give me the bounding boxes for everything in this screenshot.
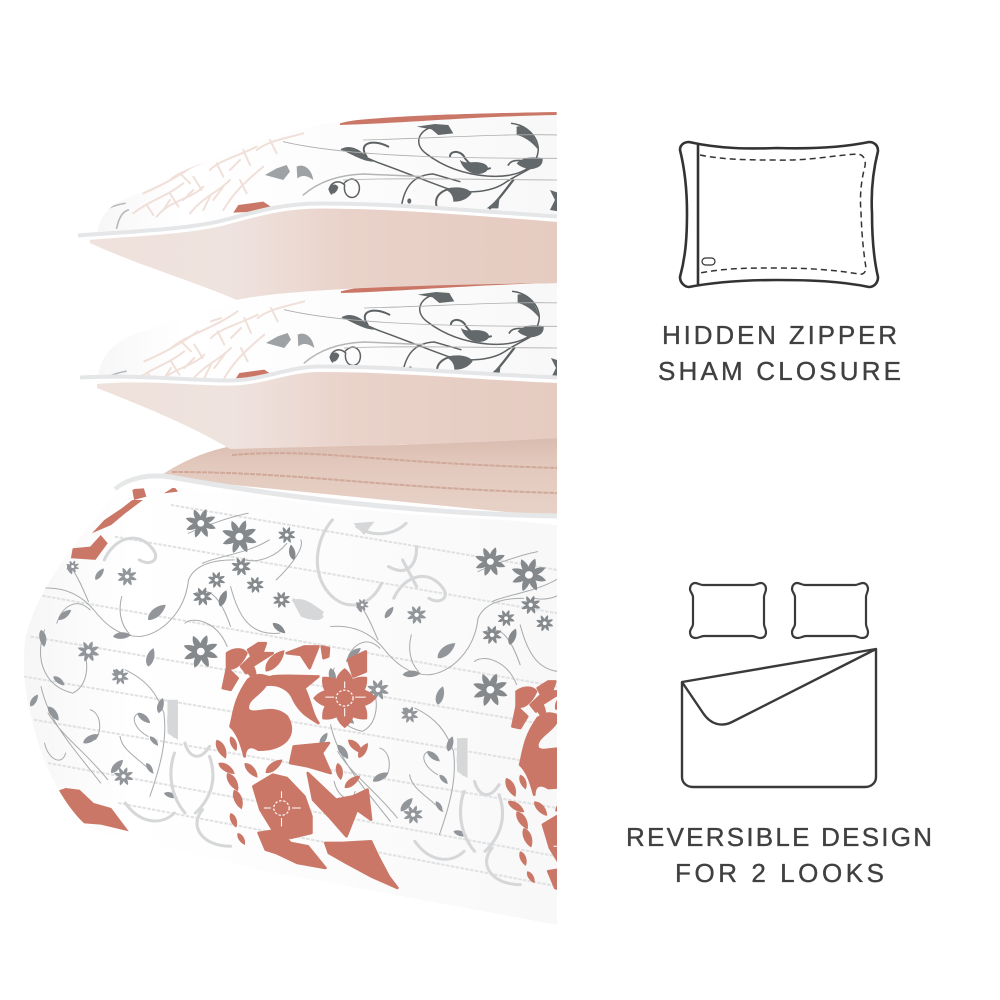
icon: two pillows and folded duvet	[682, 583, 876, 787]
icon: duvet with folded corner	[682, 649, 876, 787]
comforter white piping	[116, 477, 557, 520]
icon: zipper pull	[702, 258, 715, 265]
upper sham printed top	[98, 112, 557, 232]
heading: hidden zipper sham closure	[658, 320, 901, 386]
comforter reverse side: blush quilted fabric	[163, 438, 557, 517]
coral patch bottom left	[52, 788, 129, 831]
heading: reversible design for 2 looks: REVERSIBLE DESIGN	[626, 822, 932, 852]
heading: reversible design for 2 looks: FOR 2 LOOKS	[675, 858, 884, 888]
icon: pillow sham with hidden zipper	[680, 142, 878, 287]
coral floral patch centre	[213, 643, 397, 888]
lower sham printed top	[99, 283, 557, 378]
upper sham blush underside	[90, 208, 557, 300]
upper pillow sham	[78, 108, 560, 300]
icon: left pillow	[690, 583, 766, 638]
lower pillow sham	[80, 280, 561, 449]
heading: hidden zipper sham closure: HIDDEN ZIPPER	[662, 320, 897, 350]
white mask at photo right edge	[558, 100, 588, 940]
coral patch top left	[71, 485, 178, 560]
icon: right pillow	[792, 583, 868, 638]
comforter roll: printed floral quilt	[24, 488, 557, 890]
quilting stitch lines	[24, 505, 557, 886]
heading: reversible design for 2 looks	[626, 822, 932, 888]
lower sham blush underside	[97, 372, 557, 449]
coral floral patch right	[505, 680, 557, 890]
upper sham white piping	[78, 205, 557, 239]
grey floral tile right	[320, 548, 557, 886]
grey floral tile left	[28, 508, 417, 846]
lower sham white piping	[80, 368, 557, 384]
heading: hidden zipper sham closure: SHAM CLOSURE	[658, 356, 901, 386]
